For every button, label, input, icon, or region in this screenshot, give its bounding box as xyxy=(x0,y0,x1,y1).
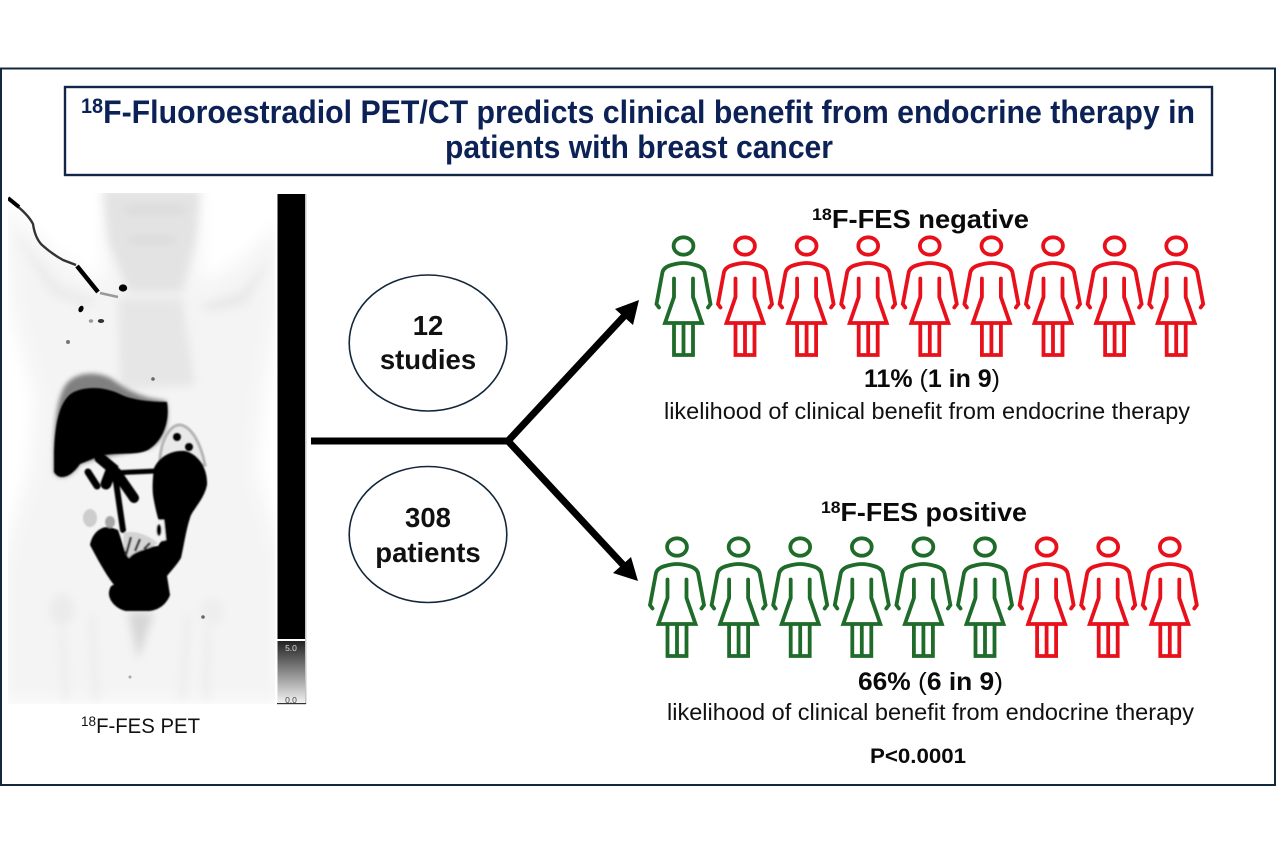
heading: FES positive: 18 xyxy=(821,498,841,517)
title text xyxy=(81,94,1195,165)
heading: FES negative: F-FES negative xyxy=(832,204,1029,234)
ellipse: 308 patients: 308 xyxy=(405,502,451,533)
colour scale bar xyxy=(277,194,306,705)
title text: F-Fluoroestradiol PET/CT predicts clinical benefit from endocrine therapy in xyxy=(103,94,1195,130)
ellipse: 12 studies: studies xyxy=(380,344,476,375)
ellipse: 12 studies xyxy=(349,275,507,411)
colour scale bar: 5.0 xyxy=(285,643,297,653)
description: positive: likelihood of clinical benefit from endocrine therapy xyxy=(667,699,1195,725)
bowel and colon xyxy=(83,433,207,611)
liver xyxy=(54,374,168,477)
branching arrows xyxy=(311,300,639,581)
soft tissue and bone uptake xyxy=(57,193,246,654)
title text: 18 xyxy=(81,95,103,118)
statistic: 11 percent: 11% (1 in 9) xyxy=(864,365,1000,393)
image caption: F-FES PET xyxy=(96,715,200,738)
heading: FES positive: F-FES positive xyxy=(841,497,1027,527)
image caption: 18 xyxy=(81,713,96,729)
description: negative: likelihood of clinical benefit from endocrine therapy xyxy=(664,398,1191,424)
title text: patients with breast cancer xyxy=(445,129,833,165)
colour scale bar: 0.0 xyxy=(285,695,297,705)
ellipse: 308 patients xyxy=(349,466,507,602)
pictogram: FES positive row xyxy=(650,538,1197,656)
arm vein and focal uptake xyxy=(8,198,205,678)
stomach xyxy=(160,425,205,466)
statistic: 66 percent: 66% (6 in 9) xyxy=(858,668,1003,696)
heading: FES negative: 18 xyxy=(812,205,832,224)
PET scan image xyxy=(2,190,282,704)
body silhouette xyxy=(8,230,275,698)
ellipse: 308 patients: patients xyxy=(375,537,481,568)
ellipse: 12 studies: 12 xyxy=(413,310,443,341)
p value: P<0.0001 xyxy=(870,744,966,768)
title box xyxy=(65,87,1212,175)
pictogram: FES negative row xyxy=(656,237,1203,355)
